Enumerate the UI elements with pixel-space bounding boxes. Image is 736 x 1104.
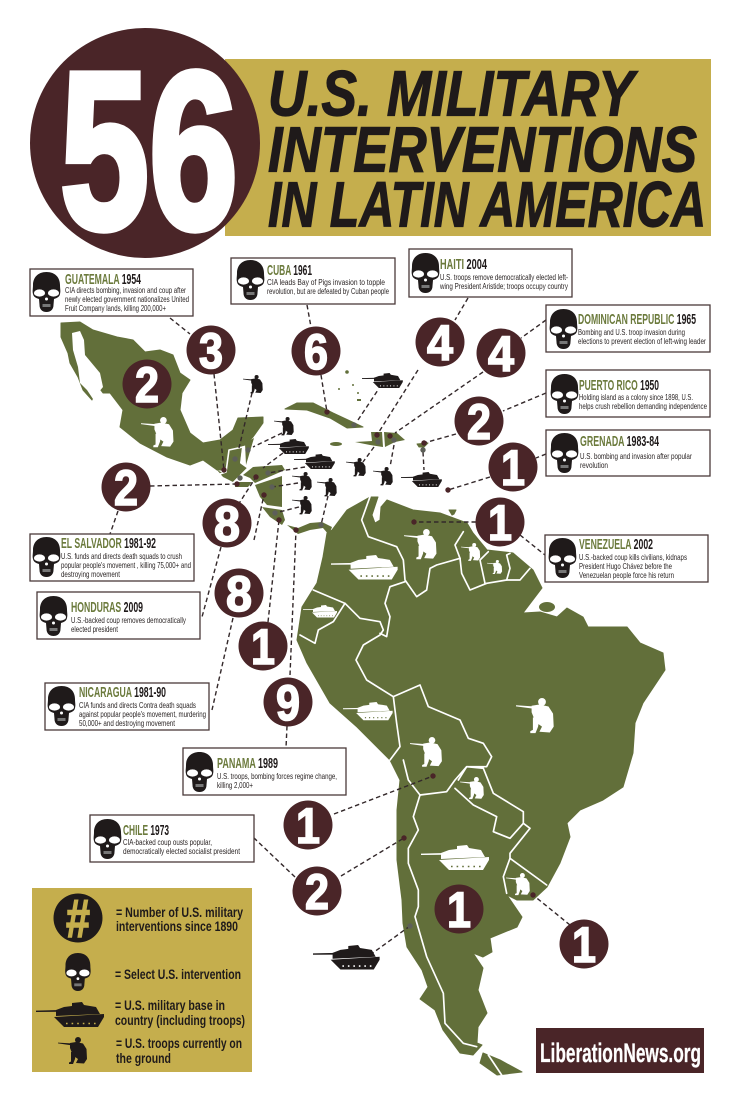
legend text: tank: country (including troops)	[115, 1013, 245, 1028]
legend text: number	[116, 905, 243, 934]
number circle: Cuba 6	[292, 324, 340, 380]
number circle: Bolivia 1	[284, 798, 332, 854]
callout: Nicaragua: CIA funds and directs Contra death squads	[79, 700, 196, 710]
black soldiers: troops	[243, 375, 393, 514]
Mexico	[61, 322, 263, 470]
logo: LiberationNews.org	[536, 1028, 704, 1073]
number circle: Costa Rica 1	[238, 619, 288, 675]
number circle: Puerto Rico 2: 2	[467, 394, 491, 450]
number circle: Venezuela 1: 1	[488, 495, 512, 551]
number circle: Puerto Rico 2	[454, 394, 504, 450]
header: gold title banner	[225, 59, 711, 236]
legend text: number: = Number of U.S. military	[116, 905, 243, 920]
callout: Panama: killing 2,000+	[217, 780, 253, 790]
callout: Grenada: GRENADA 1983-84	[580, 433, 659, 450]
number circle: Mexico 2: 2	[135, 357, 159, 413]
legend icon: number symbol	[54, 889, 102, 949]
number circle: Dominican Republic 4: 4	[488, 326, 514, 382]
callout: Honduras: HONDURAS 2009	[71, 599, 143, 616]
callout: El Salvador: destroying movement	[61, 569, 120, 579]
callout: Guatemala: GUATEMALA 1954	[65, 271, 141, 288]
legend text: skull: = Select U.S. intervention	[115, 967, 241, 982]
legend icon: skull	[65, 953, 91, 991]
number circle: Nicaragua 8: 8	[226, 566, 252, 622]
legend text: number: interventions since 1890	[116, 919, 238, 934]
legend text: soldier	[116, 1036, 242, 1066]
legend panel	[32, 888, 252, 1072]
callout: Venezuela	[545, 535, 708, 582]
callout: Guatemala	[30, 269, 193, 316]
number circle: Panama 9: 9	[276, 675, 300, 731]
legend text: tank	[115, 998, 245, 1028]
callout: Puerto Rico	[546, 370, 710, 417]
intervention location dots	[221, 409, 536, 929]
callout: Cuba: CIA leads Bay of Pigs invasion to topple	[267, 277, 385, 287]
title: U.S. MILITARY	[268, 58, 638, 130]
big number circle: 56	[60, 26, 238, 276]
callout: Cuba	[231, 258, 395, 304]
number circle: Venezuela 1	[476, 495, 524, 551]
callout: Dominican Republic: Bombing and U.S. troop invasion during	[578, 327, 685, 337]
number circle: Uruguay 1	[560, 917, 608, 973]
callout: Chile: CHILE 1973	[123, 822, 169, 839]
legend icon: tank	[36, 1002, 104, 1027]
number circle: Guatemala 3: 3	[199, 323, 223, 379]
white tanks on map	[303, 555, 489, 870]
number circle: Honduras 8: 8	[214, 496, 240, 552]
callout: Honduras	[37, 592, 200, 639]
title	[268, 58, 706, 240]
callout: Nicaragua: against popular people's movement, murdering	[79, 709, 206, 719]
callout: Grenada	[546, 430, 710, 476]
number circle: Cuba 6: 6	[304, 324, 328, 380]
callout: Nicaragua	[45, 683, 209, 730]
number circle: Grenada 1	[488, 440, 538, 496]
number circle: Dominican Republic 4	[476, 326, 526, 382]
national borders south	[403, 760, 547, 1075]
callout: Dominican Republic	[546, 305, 710, 352]
callout: El Salvador: EL SALVADOR 1981-92	[61, 535, 156, 552]
callout: Honduras: U.S.-backed coup removes democratically	[71, 615, 186, 625]
callout: Cuba: CUBA 1961	[267, 262, 312, 279]
number circle: Costa Rica 1: 1	[251, 619, 275, 675]
callout: Guatemala: newly elected government nationalizes United	[65, 294, 189, 304]
callout: Grenada: U.S. bombing and invasion after popular	[580, 451, 692, 461]
callout: Grenada: revolution	[580, 460, 608, 470]
callout: Puerto Rico: PUERTO RICO 1950	[579, 377, 659, 394]
number circle: Argentina 1	[434, 882, 484, 938]
callout: Venezuela: Venezuelan people force his return	[579, 570, 674, 580]
callout: Panama: U.S. troops, bombing forces regime change,	[217, 771, 337, 781]
number circle: Chile 2	[292, 864, 342, 920]
leader lines	[110, 298, 570, 955]
callout: Chile	[90, 815, 254, 862]
legend text: soldier: = U.S. troops currently on	[116, 1036, 242, 1051]
number circle: Nicaragua 8	[214, 566, 264, 622]
legend text: soldier: the ground	[116, 1051, 171, 1066]
callout: Panama	[183, 748, 346, 795]
callout: Haiti: wing President Aristide; troops occupy country	[439, 281, 569, 291]
callout: Haiti	[409, 249, 572, 297]
number circle: Haiti 4: 4	[427, 315, 453, 371]
callout: Chile: CIA-backed coup ousts popular,	[123, 837, 212, 847]
number circle: Mexico 2	[122, 357, 172, 413]
callout: El Salvador: popular people's movement , killing 75,000+ and	[61, 560, 191, 570]
callout: Venezuela: President Hugo Chávez before the	[579, 561, 672, 571]
number circle: El Salvador 2: 2	[114, 460, 138, 516]
number circle: Chile 2: 2	[305, 864, 329, 920]
callout: El Salvador	[30, 534, 194, 581]
number circle: Honduras 8	[202, 496, 252, 552]
callout: Cuba: revolution, but are defeated by Cuban people	[267, 286, 389, 296]
callout: Venezuela: U.S.-backed coup kills civilians, kidnaps	[579, 552, 687, 562]
legend icon: number symbol: #	[66, 889, 90, 949]
callout: Guatemala: Fruit Company lands, killing 200,000+	[65, 303, 166, 313]
callout: Haiti: U.S. troops remove democratically elected left-	[440, 272, 568, 282]
callout: Haiti: HAITI 2004	[440, 256, 487, 273]
number circle: Argentina 1: 1	[447, 882, 471, 938]
callout: Chile: democratically elected socialist president	[123, 846, 240, 856]
number circle: El Salvador 2	[102, 460, 150, 516]
Caribbean islands	[285, 370, 456, 515]
number circle: Panama 9	[264, 675, 312, 731]
callout: Honduras: elected president	[71, 624, 118, 634]
callout: Guatemala: CIA directs bombing, invasion and coup after	[65, 285, 186, 295]
number circle: Guatemala 3	[186, 323, 236, 379]
number circle: Haiti 4	[416, 315, 464, 371]
legend icon: soldier	[58, 1037, 87, 1064]
legend text: tank: = U.S. military base in	[115, 998, 225, 1013]
number circle: Grenada 1: 1	[501, 440, 525, 496]
South America	[297, 497, 665, 1075]
callout: Panama: PANAMA 1989	[217, 755, 278, 772]
black tanks: military bases	[268, 373, 442, 970]
number circle: Uruguay 1: 1	[572, 917, 596, 973]
callout: Nicaragua: NICARAGUA 1981-90	[79, 684, 166, 701]
callout: El Salvador: U.S. funds and directs death squads to crush	[61, 551, 182, 561]
map: Latin America	[61, 322, 665, 1075]
number circle: Bolivia 1: 1	[296, 798, 320, 854]
white soldiers on map	[141, 417, 554, 895]
callout: Nicaragua: 50,000+ and destroying movement	[79, 718, 175, 728]
national borders north	[300, 497, 530, 780]
Central America	[217, 438, 332, 535]
callout: Venezuela: VENEZUELA 2002	[579, 536, 653, 553]
